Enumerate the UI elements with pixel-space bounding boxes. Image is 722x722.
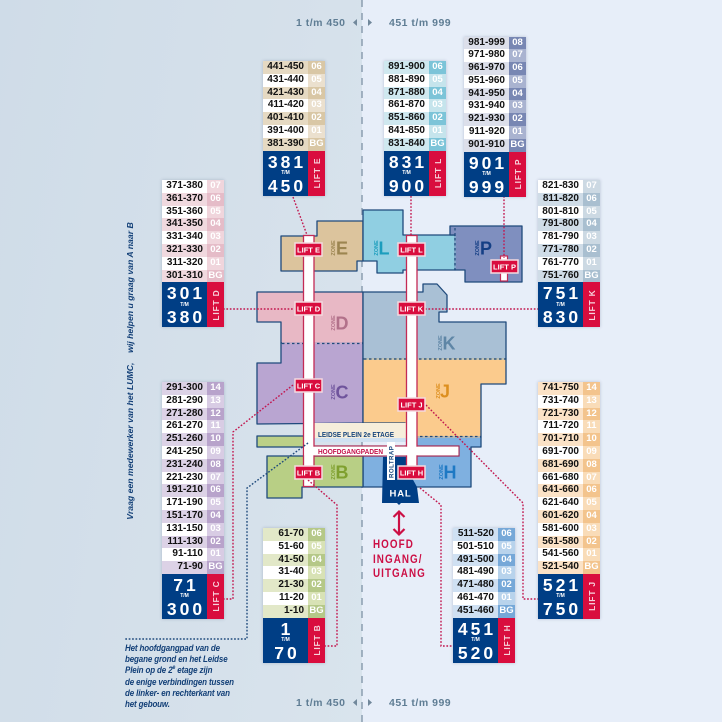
panel: lift B: T/M [281, 637, 290, 643]
panel: lift C: 14 [210, 382, 221, 393]
panel: lift C: 12 [210, 408, 221, 419]
main entrance text: UITGANG [373, 566, 426, 580]
panel: lift K: 801-810 [542, 206, 579, 217]
panel: lift D [162, 180, 224, 327]
panel: lift C: 111-130 [167, 536, 203, 547]
panel: lift K: 781-790 [542, 231, 579, 242]
lift P badge: LIFT P [493, 262, 516, 271]
panel: lift B: BG [309, 605, 324, 616]
panel: lift B: LIFT B [312, 624, 322, 656]
panel: lift C: 01 [210, 548, 221, 559]
lift J badge: LIFT J [400, 400, 423, 409]
panel: lift D: 361-370 [166, 193, 203, 204]
panel: lift L: 04 [432, 87, 443, 98]
panel: lift L: 881-890 [388, 74, 425, 85]
zone label P: P [480, 238, 492, 258]
panel: lift C: 71-90 [177, 561, 203, 572]
background: left and right building halves [0, 0, 362, 722]
panel: lift P: 07 [512, 49, 523, 60]
panel: lift E: 04 [311, 87, 322, 98]
panel: lift K [538, 180, 600, 327]
panel: lift H: T/M [471, 637, 480, 643]
panel: lift J: 601-620 [542, 510, 579, 521]
panel: lift J: 10 [586, 433, 597, 444]
panel: lift J: 641-660 [542, 484, 579, 495]
lift B badge: LIFT B [297, 468, 321, 477]
panel: lift L: 831-840 [388, 138, 425, 149]
lift C badge [295, 379, 322, 392]
panel: lift J: 541-560 [542, 548, 579, 559]
panel: lift E: BG [309, 138, 324, 149]
lift H badge: LIFT H [400, 468, 423, 477]
panel: lift C: 281-290 [166, 395, 203, 406]
panel: lift P: 961-970 [468, 62, 505, 73]
panel: lift P: 06 [512, 62, 523, 73]
panel: lift E: 01 [311, 125, 322, 136]
panel: lift J: 701-710 [542, 433, 579, 444]
panel: lift D: 351-360 [166, 206, 203, 217]
panel: lift C: 09 [210, 446, 221, 457]
panel: lift J: 12 [586, 408, 597, 419]
top label: right range: 451 t/m 999 [389, 17, 451, 29]
panel: lift B: 41-50 [278, 554, 304, 565]
main entrance text: INGANG/ [373, 552, 423, 566]
panel: lift K: 751-760 [542, 270, 579, 281]
panel: lift C: 241-250 [166, 446, 203, 457]
panel: lift C: 91-110 [172, 548, 203, 559]
hoofdgangpaden label: HOOFDGANGPADEN [318, 447, 383, 456]
panel: lift C: 131-150 [166, 523, 203, 534]
panel: lift H: 04 [501, 554, 512, 565]
panel: lift C: 11 [210, 420, 221, 431]
panel: lift D: BG [208, 270, 223, 281]
panel: lift E: 401-410 [267, 112, 304, 123]
panel: lift C: LIFT C [210, 581, 220, 612]
panel: lift C: 291-300 [166, 382, 203, 393]
red connector lines [223, 196, 538, 646]
panel: lift C: 191-210 [166, 484, 203, 495]
panel: lift E: 431-440 [267, 74, 304, 85]
panel: lift J: 721-730 [542, 408, 579, 419]
panel: lift C: 71 [173, 575, 199, 595]
zone label B: B [336, 462, 348, 482]
zone label E: E [336, 238, 348, 258]
panel: lift K: 761-770 [542, 257, 579, 268]
zone E [281, 221, 363, 271]
panel: lift J: LIFT J [586, 582, 596, 611]
panel: lift D: 06 [210, 193, 221, 204]
note about main corridor: begane grond en het Leidse [125, 653, 228, 664]
Leidse Plein second floor background [314, 423, 407, 442]
panel: lift P: 901-910 [468, 139, 505, 150]
panel: lift J [538, 382, 600, 619]
lift E badge: LIFT E [297, 245, 320, 254]
panel: lift P: 02 [512, 113, 523, 124]
zone label H: ZONE [439, 464, 445, 480]
shared edge softening [282, 236, 505, 437]
panel: lift E: T/M [281, 170, 290, 176]
panel: lift H: 451-460 [457, 605, 494, 616]
note about main corridor: de enige verbindingen tussen [125, 676, 234, 687]
zone label C: C [336, 382, 348, 402]
panel: lift E: 441-450 [267, 61, 304, 72]
panel: lift J: 731-740 [542, 395, 579, 406]
panel: lift D: 380 [167, 307, 205, 327]
panel: lift E [263, 61, 325, 196]
panel: lift E: 06 [311, 61, 322, 72]
panel: lift E: 381 [268, 152, 306, 172]
panel: lift E: 03 [311, 99, 322, 110]
panel: lift K: T/M [556, 302, 565, 308]
panel: lift C: 08 [210, 459, 221, 470]
panel: lift K: 821-830 [542, 180, 579, 191]
panel: lift C: 06 [210, 484, 221, 495]
zone P [450, 226, 522, 282]
panel: lift H: 501-510 [457, 541, 494, 552]
panel: lift C: 13 [210, 395, 221, 406]
blue connector line to note [125, 443, 308, 639]
panel: lift J: 741-750 [542, 382, 579, 393]
hal entrance [382, 457, 419, 505]
panel: lift H: 511-520 [458, 528, 494, 539]
bottom label: left range: 1 t/m 450 [296, 697, 345, 709]
direction arrows bottom [353, 699, 372, 706]
Leidse Plein label: LEIDSE PLEIN 2e ETAGE [318, 430, 394, 439]
panel: lift H: 461-470 [457, 592, 494, 603]
panel: lift J: 09 [586, 446, 597, 457]
zone L [363, 210, 455, 273]
lift D badge: LIFT D [297, 304, 321, 313]
panel: lift D: 301 [167, 283, 205, 303]
panel: lift H: 471-480 [457, 579, 494, 590]
zone H [363, 437, 481, 487]
panel: lift J: 03 [586, 523, 597, 534]
panel: lift H: 451 [458, 619, 496, 639]
panel: lift K: 791-800 [542, 218, 579, 229]
zone label D: D [336, 314, 348, 334]
panel: lift K: 04 [586, 218, 597, 229]
panel: lift D: 03 [210, 231, 221, 242]
zone label B: ZONE [331, 464, 337, 480]
panel: lift P: 04 [512, 88, 523, 99]
hal entrance: HAL [390, 488, 411, 500]
panel: lift C: 261-270 [166, 420, 203, 431]
panel: lift D: 321-330 [166, 244, 203, 255]
zone label H: H [444, 462, 456, 482]
zone label P: ZONE [475, 240, 481, 256]
panel: lift P: 08 [512, 36, 523, 48]
panel: lift H: 481-490 [457, 566, 494, 577]
panel: lift C: 04 [210, 510, 221, 521]
panel: lift J: T/M [556, 593, 565, 599]
lift L badge: LIFT L [400, 245, 423, 254]
panel: lift J: 13 [586, 395, 597, 406]
panel: lift P: 999 [469, 177, 507, 197]
lift P badge [491, 260, 518, 273]
panel: lift J: 681-690 [542, 459, 579, 470]
zone label E: ZONE [331, 240, 337, 256]
arrow: main entrance in and out [394, 512, 404, 534]
panel: lift B: 70 [274, 643, 300, 663]
panel: lift K: 751 [543, 283, 581, 303]
lift B badge [295, 466, 322, 479]
lift badges [295, 243, 518, 479]
panel: lift J: 750 [543, 599, 581, 619]
panel: lift P [464, 36, 526, 197]
lift J badge [398, 398, 425, 411]
panel: lift P: 931-940 [468, 100, 505, 111]
roltrap: ROLTRAP [388, 446, 395, 478]
panel: lift E: 450 [268, 176, 306, 196]
zone C [257, 343, 363, 424]
zones of the building [257, 210, 522, 498]
zone label L: ZONE [374, 240, 380, 256]
panel: lift C: 221-230 [166, 472, 203, 483]
panel: lift D: 01 [210, 257, 221, 268]
note about main corridor: het gebouw. [125, 698, 170, 709]
panel: lift B: 31-40 [278, 566, 304, 577]
panel: lift K: 07 [586, 180, 597, 191]
panel: lift J: 661-680 [542, 472, 579, 483]
panel: lift P: 901 [469, 153, 507, 173]
panel: lift K: 02 [586, 244, 597, 255]
panel: lift L: 900 [389, 176, 427, 196]
zone boundary dashes [282, 228, 506, 436]
panel: lift P: 921-930 [468, 113, 505, 124]
panel: lift H [453, 528, 515, 663]
panel: lift C: 251-260 [166, 433, 203, 444]
panel: lift C: 271-280 [166, 408, 203, 419]
lift K badge [398, 302, 425, 315]
panel: lift K: 05 [586, 206, 597, 217]
left lift shaft [304, 236, 314, 486]
lift L badge [398, 243, 425, 256]
panel: lift H: 520 [458, 643, 496, 663]
panel: lift H: 01 [501, 592, 512, 603]
main entrance text [373, 537, 426, 580]
panel: lift C: 151-170 [166, 510, 203, 521]
panel: lift K: 06 [586, 193, 597, 204]
panel: lift P: 03 [512, 100, 523, 111]
lift C badge: LIFT C [297, 381, 321, 390]
panel: lift B [263, 528, 325, 663]
panel: lift J: 561-580 [542, 536, 579, 547]
panel: lift D: LIFT D [210, 289, 220, 320]
panel: lift K: 01 [586, 257, 597, 268]
panel: lift D: 05 [210, 206, 221, 217]
panel: lift C: 05 [210, 497, 221, 508]
panel: lift C: T/M [180, 593, 189, 599]
panel: lift B: 02 [311, 579, 322, 590]
panel: lift L: 831 [389, 152, 427, 172]
panel: lift H: 05 [501, 541, 512, 552]
lift D badge [295, 302, 322, 315]
note about main corridor: de linker- en rechterkant van [125, 687, 230, 698]
panel: lift E: 02 [311, 112, 322, 123]
panel: lift J: 621-640 [542, 497, 579, 508]
panel: lift D: 331-340 [166, 231, 203, 242]
panel: lift B: 01 [311, 592, 322, 603]
panel: lift H: 03 [501, 566, 512, 577]
panel: lift H: 06 [501, 528, 512, 539]
zone D [257, 292, 363, 343]
panel: lift K: 771-780 [542, 244, 579, 255]
panel: lift L: 891-900 [388, 61, 425, 72]
panel: lift K: BG [584, 270, 599, 281]
panel: lift L: 05 [432, 74, 443, 85]
zone label K: ZONE [438, 335, 444, 351]
panel: lift D: 02 [210, 244, 221, 255]
panel: lift B: 21-30 [278, 579, 304, 590]
panel: lift J: 521-540 [542, 561, 579, 572]
panel: lift E: LIFT E [312, 158, 322, 188]
strip beside Leidse Plein [257, 436, 304, 447]
panel: lift L: 02 [432, 112, 443, 123]
panel: lift J: 521 [543, 575, 581, 595]
panel: lift L: 871-880 [388, 87, 425, 98]
zone label D: ZONE [331, 315, 337, 331]
panel: lift C: BG [208, 561, 223, 572]
panel: lift H: 491-500 [457, 554, 494, 565]
panel: lift B: 61-70 [278, 528, 304, 539]
panel: lift L [384, 61, 446, 196]
panel: lift D: 311-320 [167, 257, 203, 268]
panel: lift P: 911-920 [469, 126, 505, 137]
note about main corridor: Plein op de 2e etage zijn [125, 664, 212, 675]
zone label J: ZONE [436, 383, 442, 399]
panel: lift J: 11 [586, 420, 597, 431]
panel: lift B: 05 [311, 541, 322, 552]
panel: lift E: 381-390 [267, 138, 304, 149]
zone label C: ZONE [331, 384, 337, 400]
panel: lift L: 841-850 [388, 125, 425, 136]
lift E badge [295, 243, 322, 256]
panel: lift H: LIFT H [502, 624, 512, 656]
panel: lift B: 51-60 [278, 541, 304, 552]
panel: lift B: 03 [311, 566, 322, 577]
panel: lift P: BG [510, 139, 525, 150]
panel: lift J: 581-600 [542, 523, 579, 534]
panel: lift D: T/M [180, 302, 189, 308]
panel: lift C: 300 [167, 599, 205, 619]
direction arrows top [353, 19, 372, 26]
lift H badge [398, 466, 425, 479]
note about main corridor: Het hoofdgangpad van de [125, 642, 220, 653]
lift K badge: LIFT K [400, 304, 424, 313]
panel: lift P: T/M [482, 171, 491, 177]
panel: lift P: 951-960 [468, 75, 505, 86]
panel: lift E: 391-400 [267, 125, 304, 136]
panel: lift J: 711-720 [543, 420, 579, 431]
panel: lift E: 411-420 [268, 99, 304, 110]
panel: lift P: 941-950 [468, 88, 505, 99]
right lift shaft [406, 236, 417, 468]
panel: lift C: 171-190 [166, 497, 203, 508]
lift P shaft [500, 256, 508, 281]
panel: lift C: 231-240 [166, 459, 203, 470]
panel: lift P: 05 [512, 75, 523, 86]
panel: lift K: LIFT K [586, 289, 596, 320]
zone J [363, 359, 506, 437]
panel: lift L: 851-860 [388, 112, 425, 123]
zone label K: K [442, 334, 456, 354]
side text: Vraag een medewerker van het LUMC, wij helpen u graag van A naar B [125, 222, 135, 520]
panel: lift B: 04 [311, 554, 322, 565]
zone letters [331, 238, 492, 482]
panel: lift E: 05 [311, 74, 322, 85]
panel: lift H: BG [499, 605, 514, 616]
panel: lift J: 01 [586, 548, 597, 559]
panel: lift P: 01 [512, 126, 523, 137]
panel: lift D: 07 [210, 180, 221, 191]
panel: lift J: 06 [586, 484, 597, 495]
panel: lift J: 14 [586, 382, 597, 393]
panel: lift J: 04 [586, 510, 597, 521]
panel: lift K: 811-820 [543, 193, 579, 204]
panel: lift E: 421-430 [267, 87, 304, 98]
panel: lift L: LIFT L [432, 158, 442, 188]
panel: lift K: 830 [543, 307, 581, 327]
bottom label: right range: 451 t/m 999 [389, 697, 451, 709]
panel: lift L: BG [430, 138, 445, 149]
panel: lift D: 341-350 [166, 218, 203, 229]
zone B [267, 456, 363, 498]
panel: lift C: 03 [210, 523, 221, 534]
panel: lift B: 06 [311, 528, 322, 539]
panel: lift D: 301-310 [166, 270, 203, 281]
panel: lift L: 861-870 [388, 99, 425, 110]
note about main corridor [125, 642, 234, 709]
panel: lift L: 03 [432, 99, 443, 110]
zone label L: L [378, 238, 390, 258]
panel: lift J: 07 [586, 472, 597, 483]
panel: lift D: 04 [210, 218, 221, 229]
panel: lift P: 981-999 [468, 36, 505, 48]
panel: lift J: BG [584, 561, 599, 572]
centre divider [361, 0, 363, 722]
hoofdgangpaden corridor border [304, 446, 459, 456]
corridor junction overlay [304, 447, 458, 455]
panel: lift C: 02 [210, 536, 221, 547]
panel: lift C: 07 [210, 472, 221, 483]
zone K [363, 284, 506, 359]
panel: lift J: 02 [586, 536, 597, 547]
panel: lift J: 05 [586, 497, 597, 508]
panel: lift D: 371-380 [166, 180, 203, 191]
panel: lift P: LIFT P [512, 159, 522, 190]
top label: left range: 1 t/m 450 [296, 17, 345, 29]
panel: lift C: 10 [210, 433, 221, 444]
panel: lift B: 1 [281, 619, 293, 639]
panel: lift C [162, 382, 224, 619]
panel: lift J: 08 [586, 459, 597, 470]
main entrance text: HOOFD [373, 537, 414, 551]
panel: lift J: 691-700 [542, 446, 579, 457]
panel: lift H: 02 [501, 579, 512, 590]
panel: lift L: 01 [432, 125, 443, 136]
panel: lift L: T/M [402, 170, 411, 176]
panel: lift K: 03 [586, 231, 597, 242]
panel: lift P: 971-980 [468, 49, 505, 60]
panel: lift L: 06 [432, 61, 443, 72]
panel: lift B: 11-20 [279, 592, 304, 603]
panel: lift B: 1-10 [284, 605, 304, 616]
zone label J: J [440, 382, 450, 402]
